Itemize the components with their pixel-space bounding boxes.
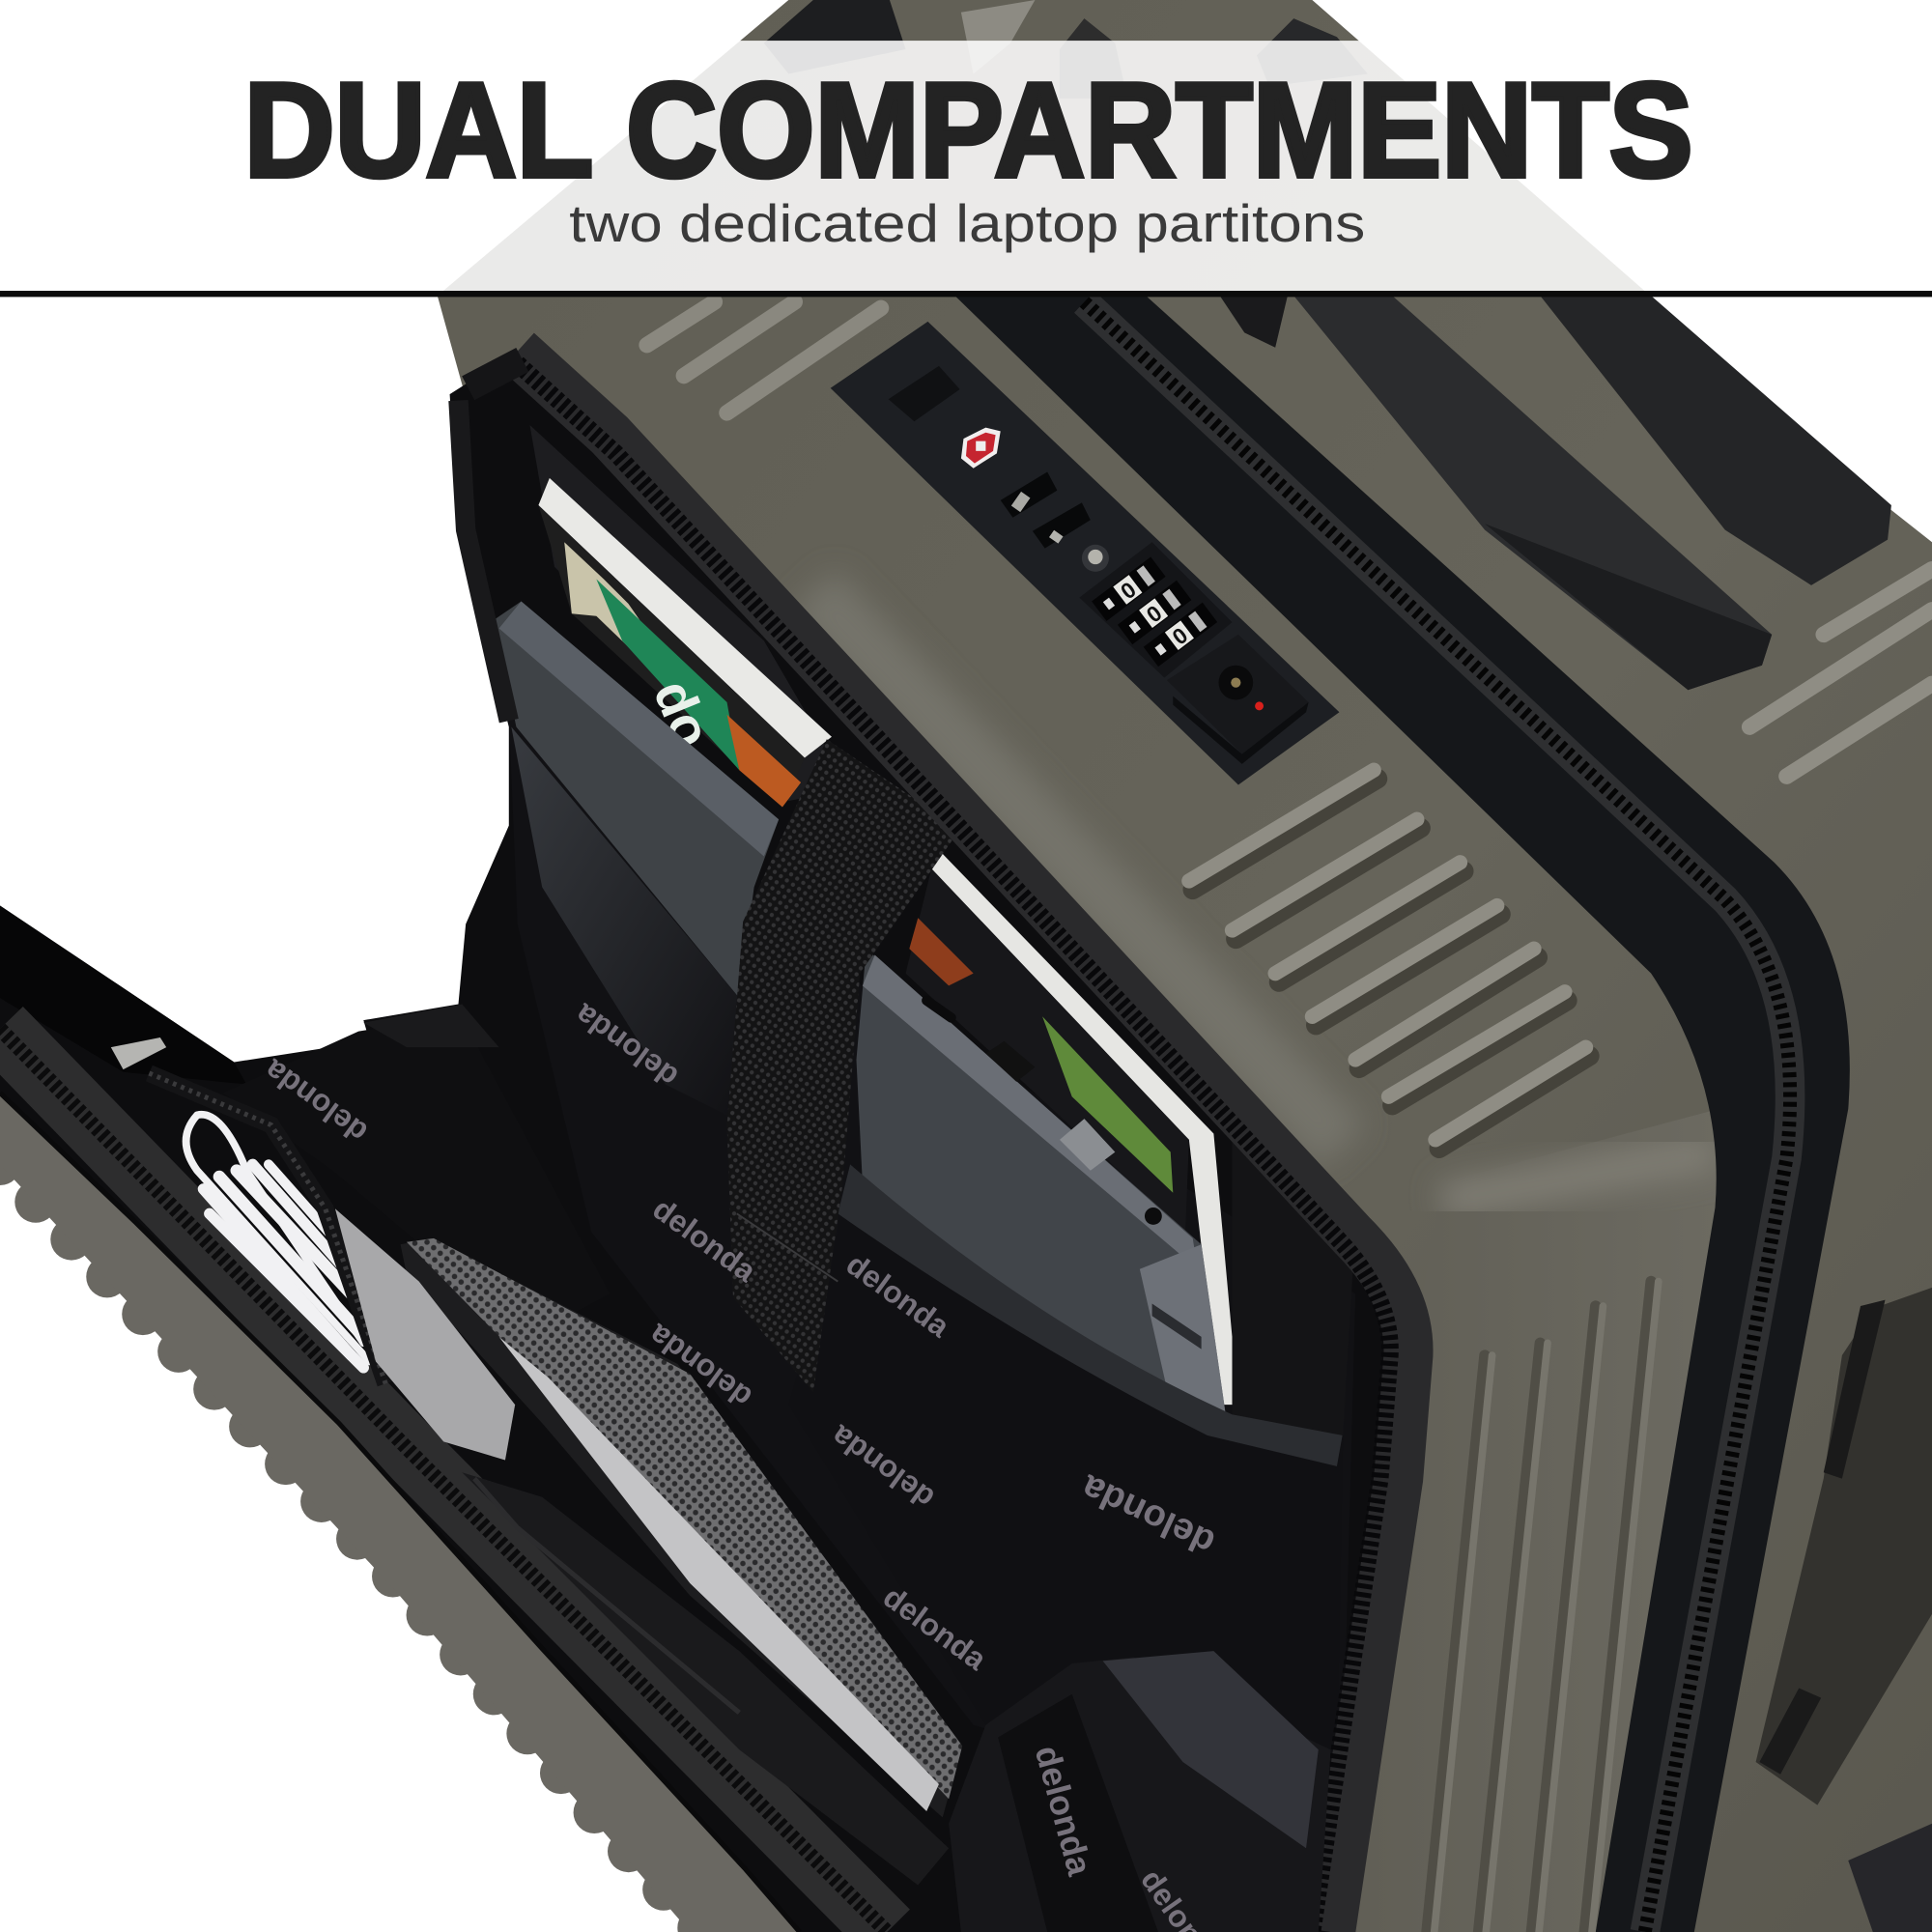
- suitcase shell: [438, 0, 1932, 1932]
- USB-A port: [985, 1041, 1035, 1082]
- shell ribs: right group: [1749, 569, 1932, 777]
- rear pocket fabric, upper: [529, 425, 850, 801]
- lower mesh pocket: [462, 1472, 949, 1886]
- lid taupe ribbed edge: [0, 1093, 800, 1932]
- subtitle: two dedicated laptop partitons: [569, 193, 1365, 253]
- lid shiny lip: [0, 906, 246, 1084]
- combination dials: 0: [1116, 577, 1141, 604]
- release button: [1082, 545, 1109, 572]
- lid zip track: [0, 1029, 887, 1932]
- carry handle: [1220, 296, 1772, 690]
- front pocket panel: [788, 1164, 1343, 1799]
- audio jack: [1145, 1208, 1162, 1225]
- shell ribs: middle group: [1189, 770, 1589, 1149]
- lock slot two: [1033, 502, 1091, 549]
- combination dials: 0: [1168, 622, 1192, 650]
- combination dials: [1079, 542, 1233, 678]
- cable pocket zipper: [111, 1037, 385, 1383]
- TSA key lock: [1167, 635, 1309, 764]
- webbing strap: [727, 739, 960, 1392]
- inner lid flap: delonda: [258, 1052, 374, 1151]
- satin corner flap: delonda: [1028, 1742, 1099, 1881]
- title: DUAL COMPARTMENTS: [244, 55, 1693, 205]
- magazine, upper part: [538, 478, 832, 807]
- shell ribs: upper group: [647, 301, 881, 412]
- front pocket satin fold: [511, 727, 739, 1115]
- compartment zipper: [458, 352, 1408, 1932]
- brand prints on lining: delonda: [840, 1246, 956, 1344]
- brand prints on lining: delonda: [646, 1191, 763, 1289]
- inner lid flap: delo: [426, 1244, 477, 1292]
- handle release recess: [889, 366, 960, 421]
- laptop, lower part with ports: [856, 949, 1226, 1417]
- mesh flap: [335, 1208, 515, 1460]
- side handle: [1756, 1288, 1932, 1932]
- white charging cable: [186, 1115, 370, 1368]
- interior and open lid silhouette: [0, 352, 1417, 1932]
- TSA red diamond: [961, 428, 1001, 469]
- trolley bar: [1540, 296, 1891, 585]
- USB-C port: [926, 1001, 952, 1018]
- main compartment lining: [509, 715, 1355, 1799]
- combination lock panel: [831, 322, 1339, 784]
- inner lid flap: [223, 1005, 610, 1337]
- laptop, upper part: [494, 601, 779, 998]
- lock slot one: [1001, 472, 1057, 518]
- shell ribs: front face: [1427, 1282, 1659, 1932]
- brand prints on lining: delonda: [877, 1579, 993, 1677]
- side lining strip: [1233, 1115, 1353, 1435]
- magazine, lower part: [906, 854, 1238, 1405]
- satin corner flap: [949, 1651, 1331, 1932]
- mesh pocket: [401, 1238, 962, 1817]
- brand prints on lining: delonda: [1074, 1466, 1221, 1564]
- magazine, upper part: do: [642, 671, 724, 755]
- brand prints on lining: delonda: [641, 1318, 758, 1415]
- brand prints on lining: delonda: [824, 1418, 941, 1516]
- translucent header band: [0, 41, 1932, 294]
- upper handle and top details: [764, 0, 1368, 99]
- combination dials: 0: [1142, 600, 1167, 628]
- seam trim band with zipper: [955, 296, 1850, 1932]
- brand prints on lining: [568, 997, 1221, 1677]
- HDMI port: [1060, 1119, 1115, 1171]
- brand prints on lining: delonda: [568, 997, 684, 1094]
- header rule: [0, 291, 1932, 297]
